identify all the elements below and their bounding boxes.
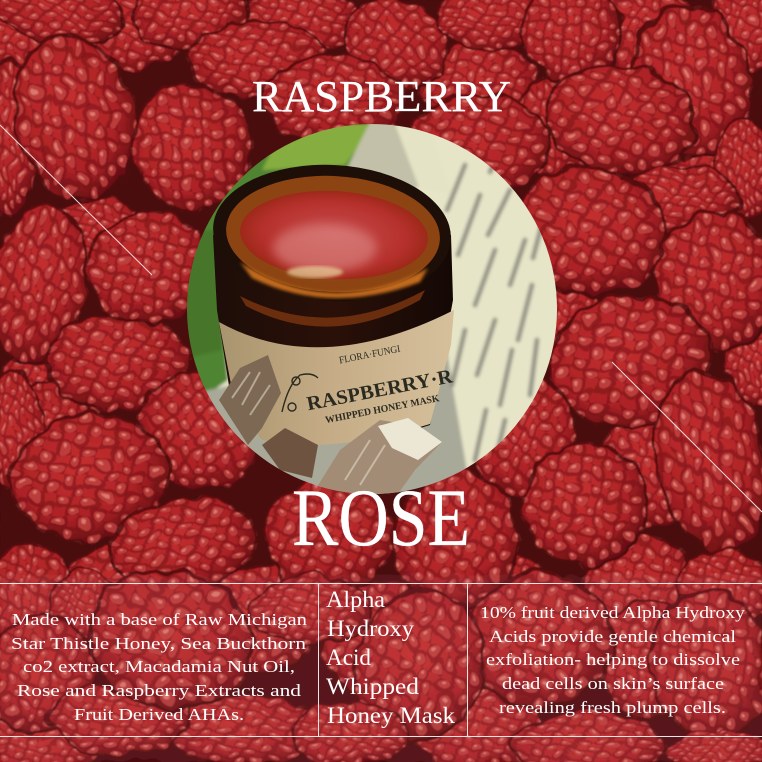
jar body — [213, 235, 453, 440]
text block: benefits: revealing fresh plump cells. — [499, 698, 726, 717]
text block: product name: Alpha — [326, 587, 385, 612]
photo backdrop: birch bark — [180, 120, 565, 500]
jar inner glass — [226, 176, 440, 292]
text block: product name: Honey Mask — [327, 703, 456, 728]
text block: product name — [326, 587, 456, 728]
title: RASPBERRY: RASPBERRY — [252, 72, 511, 121]
text block: product name: Hydroxy — [327, 616, 415, 641]
decorative diagonal line right — [612, 362, 762, 512]
text block: ingredients: co2 extract, Macadamia Nut Oil, — [23, 657, 295, 676]
text block: ingredients — [11, 610, 308, 724]
text block: ingredients: Made with a base of Raw Michigan — [12, 610, 308, 629]
jar rim — [213, 164, 451, 301]
product photo circle — [180, 120, 565, 500]
label text: FLORA·FUNGI — [338, 344, 401, 366]
text block: ingredients: Rose and Raspberry Extracts and — [17, 681, 302, 700]
whipped honey mask — [240, 190, 428, 280]
jar label — [219, 310, 454, 445]
text block: benefits: Acids provide gentle chemical — [489, 627, 736, 646]
label botanical sketch — [282, 374, 318, 412]
title: ROSE: ROSE — [292, 472, 470, 563]
mask highlight — [273, 224, 377, 272]
bark chips — [219, 355, 442, 498]
label text — [306, 345, 454, 423]
text block: benefits — [480, 603, 746, 717]
text block: benefits: exfoliation- helping to dissolve — [486, 650, 740, 669]
label text: RASPBERRY·R — [305, 365, 455, 415]
text block: benefits: 10% fruit derived Alpha Hydroxy — [480, 603, 746, 622]
text block: ingredients: Fruit Derived AHAs. — [74, 705, 244, 724]
text block: product name: Acid — [326, 645, 371, 670]
info table frame — [0, 583, 762, 736]
amber glow of rim — [240, 262, 428, 298]
text block: ingredients: Star Thistle Honey, Sea Buckthorn — [11, 634, 307, 653]
jar shoulder glow — [240, 290, 425, 327]
mask lower shine — [287, 266, 343, 278]
text block: benefits: dead cells on skin’s surface — [502, 674, 724, 693]
decorative diagonal line left — [0, 125, 152, 275]
label text: WHIPPED HONEY MASK — [324, 393, 441, 426]
jar — [210, 159, 458, 445]
text block: product name: Whipped — [326, 674, 420, 699]
